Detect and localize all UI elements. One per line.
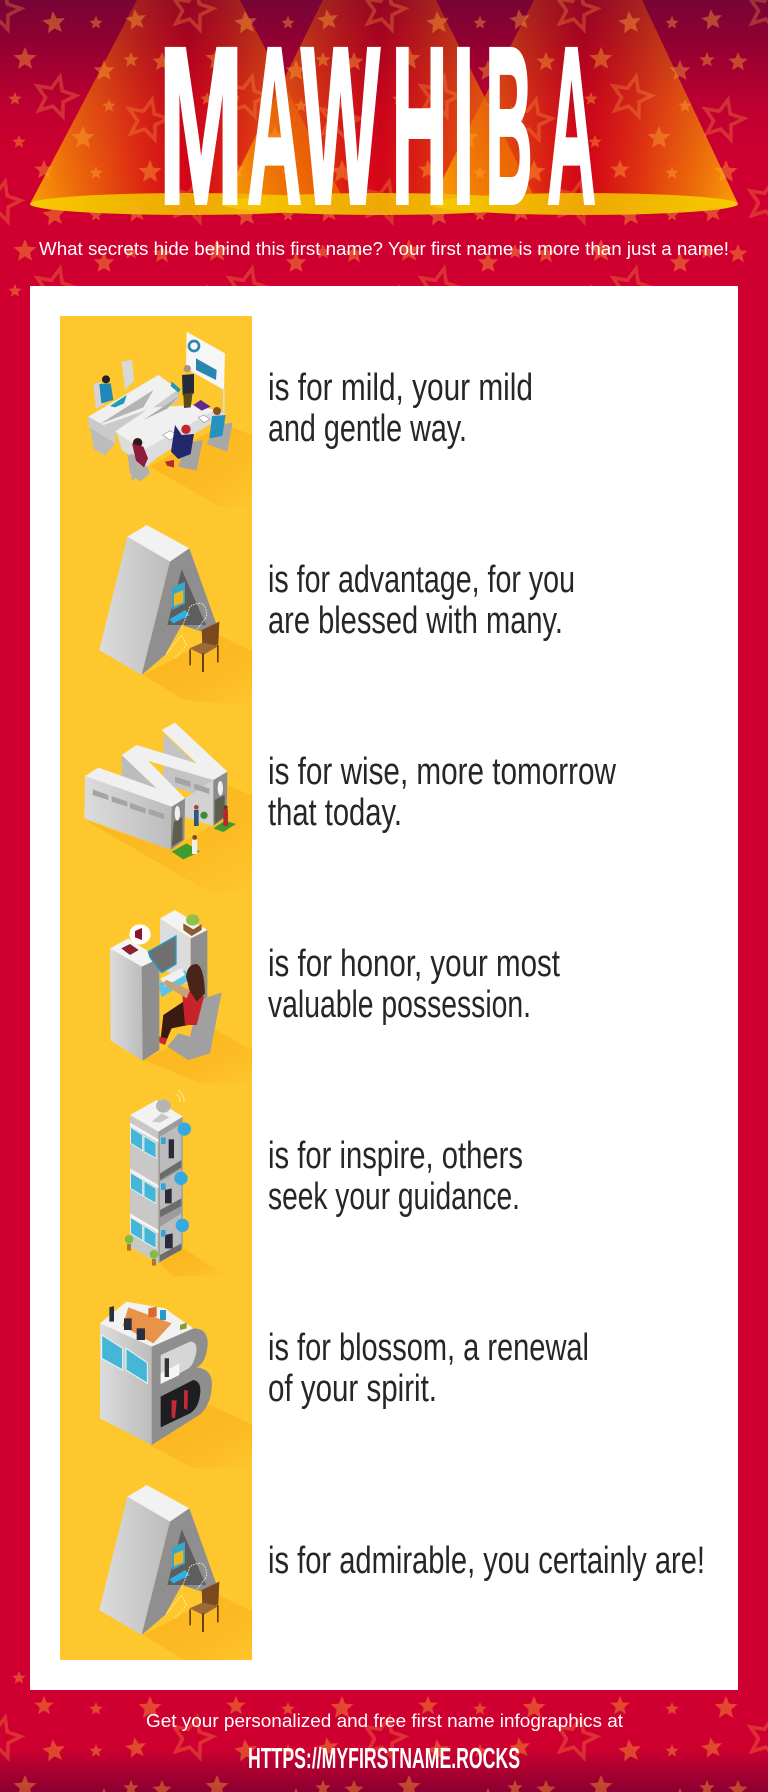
text: H	[392, 1, 448, 251]
text: letter B line: is for blossom, a renewal	[268, 1327, 589, 1369]
text: letter A line	[268, 559, 575, 642]
text: letter H line: is for honor, your most	[268, 943, 560, 985]
icon: letter I tower	[124, 1090, 212, 1276]
star pattern top	[0, 0, 768, 300]
star pattern bottom	[0, 1668, 768, 1792]
text: B	[485, 1, 533, 251]
icon: letter A with chair	[99, 525, 263, 707]
icon: letter W building	[84, 722, 252, 880]
text: letter M line: and gentle way.	[268, 408, 467, 450]
text: letter W line: is for wise, more tomorrow	[268, 751, 616, 793]
text: I	[452, 1, 474, 251]
text: M	[159, 1, 243, 251]
text: letter M line	[268, 367, 533, 450]
text: letter A line: is for advantage, for you	[268, 559, 575, 601]
text: letter H line	[268, 943, 560, 1026]
text: letter I line: seek your guidance.	[268, 1176, 520, 1218]
subtitle: What secrets hide behind this first name? Your first name is more than just a name!	[39, 238, 729, 259]
icon: letter A with chair repeated	[99, 1485, 252, 1660]
icon: letter B rooftop	[100, 1302, 263, 1468]
spotlights	[30, 0, 738, 215]
footer url: HTTPS://MYFIRSTNAME.ROCKS	[248, 1743, 520, 1775]
text: letter H line: valuable possession.	[268, 984, 531, 1026]
text: letter W line: that today.	[268, 792, 402, 834]
text: letter W line	[268, 751, 616, 834]
text: letter I line: is for inspire, others	[268, 1135, 523, 1177]
text: letter B line: of your spirit.	[268, 1368, 437, 1410]
text: letter I line	[268, 1135, 523, 1218]
panel: yellow illustration strip	[60, 316, 252, 1660]
footer call to action: Get your personalized and free first name infographics at	[146, 1711, 623, 1731]
text: letter B line	[268, 1327, 589, 1410]
text: A	[547, 1, 596, 251]
text: W	[301, 1, 380, 251]
icon: letter H desk	[110, 910, 263, 1083]
text: A	[247, 1, 302, 251]
text: letter A line: are blessed with many.	[268, 600, 563, 642]
panel: white content card	[30, 286, 738, 1690]
text: letter M line: is for mild, your mild	[268, 367, 533, 409]
icon: letter M meeting table	[88, 332, 263, 507]
illustrations	[84, 332, 263, 1667]
